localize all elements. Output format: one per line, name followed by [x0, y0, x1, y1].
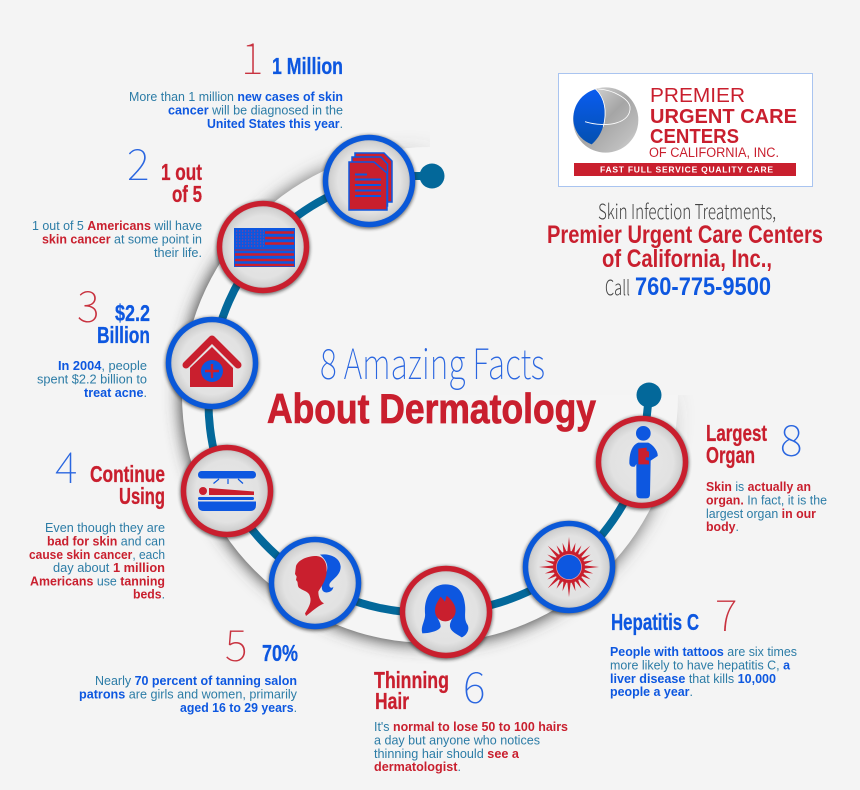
heading: $2.2 Billion: $2.2: [115, 300, 150, 326]
description 3: [37, 358, 147, 400]
description 5: aged 16 to 29 years.: [180, 700, 297, 715]
fact 6 text: [374, 654, 568, 774]
description 8: [706, 479, 827, 534]
description 1: More than 1 million new cases of skin: [129, 89, 343, 104]
logo wordmark: [649, 84, 797, 160]
description 3: spent $2.2 billion to: [37, 372, 147, 386]
description 8: body.: [706, 519, 739, 534]
description 7: People with tattoos are six times: [610, 644, 797, 659]
logo panel: [558, 74, 812, 186]
heading: 70%: 70%: [262, 640, 298, 666]
description 1: [129, 89, 343, 131]
heading: Continue Using: Continue: [90, 461, 165, 487]
description 4: beds.: [133, 586, 165, 602]
heading: Largest Organ: Organ: [706, 442, 755, 468]
logo globe: [573, 87, 638, 153]
description 4: bad for skin and can: [47, 534, 165, 548]
description 8: organ. In fact, it is the: [706, 492, 827, 508]
fact 3 icon: house with medical cross: [165, 317, 259, 411]
heading: $2.2 Billion: Billion: [97, 322, 150, 348]
fact 3 text: [37, 273, 150, 400]
heading: Thinning Hair: Thinning: [374, 667, 449, 693]
fact 8 icon: person holding organ: [595, 416, 689, 510]
fact 6 icon: hair with flame: [399, 566, 493, 660]
clinic name: of California, Inc.,: [602, 245, 772, 273]
heading: 1 Million: 1 Million: [272, 53, 343, 79]
number 7: 7: [715, 582, 737, 644]
description 7: more likely to have hepatitis C, a: [610, 658, 791, 672]
heading: 1 out of 5: of 5: [172, 181, 202, 207]
fact 5 icon: girl silhouette with ponytail: [268, 537, 362, 631]
description 2: [32, 218, 202, 260]
description 5: Nearly 70 percent of tanning salon: [95, 673, 297, 688]
description 6: a day but anyone who notices: [374, 732, 540, 748]
fact 2 icon: American flag: [216, 201, 310, 295]
fact 2 text: [32, 131, 202, 260]
heading: 1 out of 5: [161, 159, 202, 207]
description 2: skin cancer at some point in: [42, 232, 202, 246]
logo tagline band: [574, 163, 796, 176]
fact 4 icon: tanning bed: [180, 445, 274, 539]
number 4: 4: [55, 434, 77, 496]
description 3: treat acne.: [84, 385, 147, 400]
description 7: [610, 644, 797, 699]
description 7: liver disease that kills 10,000: [610, 671, 776, 686]
phone line: 760-775-9500: [635, 273, 771, 301]
description 5: [79, 673, 297, 715]
description 7: people a year.: [610, 684, 693, 699]
description 5: patrons are girls and women, primarily: [79, 686, 297, 702]
phone line: Call: [605, 271, 630, 301]
heading: Hepatitis C: Hepatitis C: [611, 609, 699, 635]
description 6: dermatologist.: [374, 759, 461, 774]
heading: 1 out of 5: 1 out: [161, 159, 202, 185]
heading: Continue Using: Using: [119, 483, 165, 509]
logo wordmark: CENTERS: [650, 125, 739, 148]
fact 5 text: [79, 612, 298, 715]
heading: Thinning Hair: [374, 667, 449, 714]
clinic name: [547, 221, 823, 273]
description 4: cause skin cancer, each: [29, 547, 165, 562]
logo wordmark: OF CALIFORNIA, INC.: [649, 145, 779, 160]
title line 2: About Dermatology: [267, 385, 597, 432]
heading: Largest Organ: Largest: [706, 420, 767, 446]
logo wordmark: URGENT CARE: [650, 105, 797, 128]
number 1: 1: [241, 25, 263, 87]
number 8: 8: [780, 407, 802, 469]
description 1: cancer will be diagnosed in the: [168, 102, 343, 118]
phone line: [605, 271, 771, 301]
description 8: Skin is actually an: [706, 479, 811, 494]
main title: [267, 331, 597, 432]
description 1: United States this year.: [207, 116, 343, 131]
shadowed disc behind the timeline: [180, 145, 680, 645]
number 5: 5: [225, 612, 247, 674]
number 2: 2: [127, 131, 149, 193]
fact 8 text: [706, 407, 827, 534]
description 4: [29, 520, 165, 602]
heading: Thinning Hair: Hair: [375, 688, 409, 714]
description 6: thinning hair should see a: [374, 746, 520, 761]
description 2: their life.: [154, 245, 202, 260]
number 6: 6: [463, 654, 485, 716]
description 3: In 2004, people: [58, 358, 147, 373]
fact 4 text: [29, 434, 165, 602]
logo tagline band: FAST FULL SERVICE QUALITY CARE: [600, 164, 773, 174]
description 4: Even though they are: [45, 520, 165, 535]
description 4: day about 1 million: [53, 560, 165, 575]
contact block: [547, 195, 823, 301]
heading: Continue Using: [90, 461, 165, 509]
fact 7 icon: virus burst: [522, 521, 616, 615]
fact 7 text: [610, 582, 797, 699]
description 6: It's normal to lose 50 to 100 hairs: [374, 719, 568, 734]
heading: $2.2 Billion: [97, 300, 150, 348]
fact 1 text: [129, 25, 343, 131]
description 6: [374, 719, 568, 774]
contact line 1: Skin Infection Treatments,: [598, 195, 776, 225]
logo wordmark: PREMIER: [650, 84, 745, 107]
number 3: 3: [77, 273, 99, 335]
description 2: 1 out of 5 Americans will have: [32, 218, 202, 233]
fact 1 icon: documents: [322, 135, 416, 229]
title line 1: 8 Amazing Facts: [320, 331, 545, 392]
timeline arc with end dots: [208, 164, 661, 613]
description 4: Americans use tanning: [30, 574, 165, 588]
description 8: largest organ in our: [706, 506, 816, 521]
heading: Largest Organ: [706, 420, 767, 468]
